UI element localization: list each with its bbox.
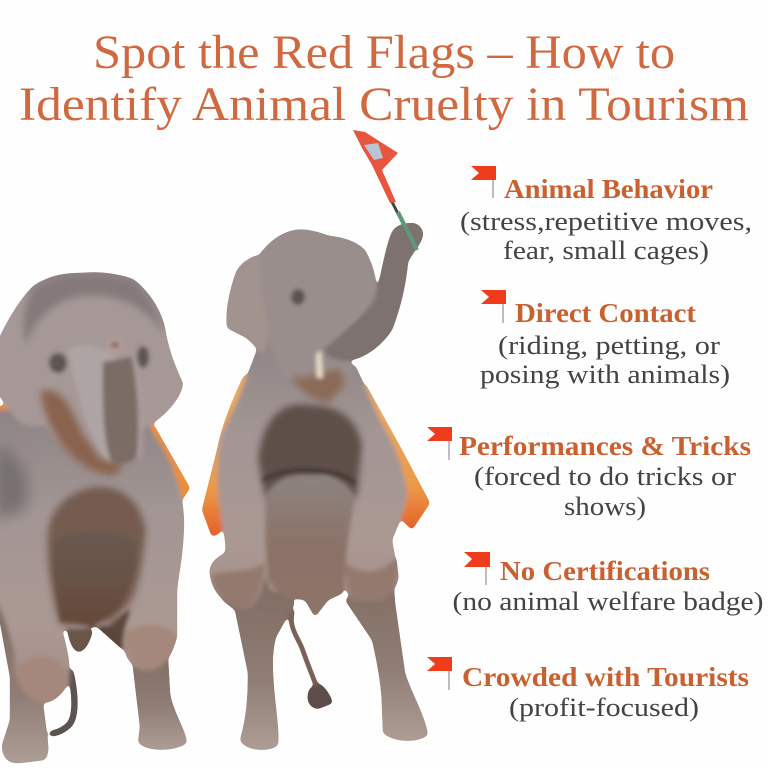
flag item: Direct Contact: (riding, petting, or: [498, 331, 720, 360]
illustration: right elephant: [202, 223, 430, 750]
icon: red flag: [471, 166, 496, 198]
flag item: Performances & Tricks: shows): [564, 492, 646, 521]
title: [19, 26, 749, 131]
illustration: left elephant: [0, 273, 190, 763]
title: Identify Animal Cruelty in Tourism: [19, 78, 749, 131]
flag item: No Certifications: No Certifications: [500, 556, 710, 586]
icon: red flag: [427, 657, 452, 690]
icon: red flag: [481, 290, 506, 323]
flag item: Direct Contact: posing with animals): [480, 360, 730, 389]
flag item: Crowded with Tourists: Crowded with Tourists: [462, 662, 749, 692]
flag item: No Certifications: (no animal welfare badge): [452, 587, 764, 616]
flag item: No Certifications: [452, 552, 764, 616]
flag item: Crowded with Tourists: (profit-focused): [509, 693, 699, 722]
flag item: Animal Behavior: Animal Behavior: [504, 174, 713, 204]
title: Spot the Red Flags – How to: [93, 26, 675, 79]
flag item: Animal Behavior: fear, small cages): [503, 236, 709, 265]
icon: red flag: [464, 552, 490, 585]
flag item: Animal Behavior: (stress,repetitive moves,: [460, 207, 752, 236]
flag item: Direct Contact: [480, 290, 730, 389]
icon: red flag: [427, 427, 452, 460]
flag item: Animal Behavior: [460, 166, 752, 265]
flag item: Performances & Tricks: [427, 427, 751, 521]
flag item: Performances & Tricks: Performances & Tricks: [459, 431, 751, 461]
flag item: Performances & Tricks: (forced to do tricks or: [474, 462, 736, 491]
flag item: Direct Contact: Direct Contact: [515, 298, 696, 328]
illustration: waving flag: [353, 130, 417, 250]
flag item: Crowded with Tourists: [427, 657, 749, 722]
